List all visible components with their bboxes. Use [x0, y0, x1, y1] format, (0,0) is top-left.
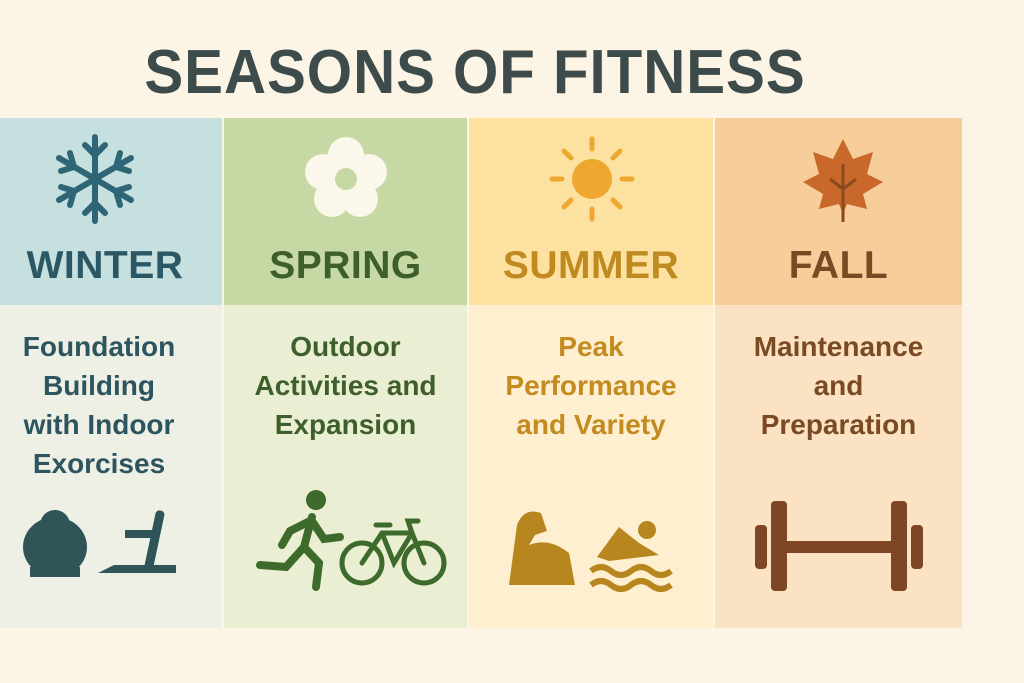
icon: snowflake — [56, 134, 134, 224]
heading: winter: WINTER — [27, 244, 183, 287]
text: winter: Foundation — [23, 331, 175, 362]
panel: summer header — [469, 118, 713, 305]
panel: fall header — [715, 118, 962, 305]
text: spring: Expansion — [275, 409, 416, 440]
panel: winter body — [0, 305, 222, 628]
icon: dumbbell — [755, 501, 923, 591]
icons: bicep and swimmer — [509, 512, 673, 592]
heading: summer: SUMMER — [503, 244, 679, 287]
text: fall: and — [814, 370, 863, 401]
text: summer: Performance — [505, 370, 677, 401]
text: fall: Maintenance — [754, 331, 923, 362]
icons: kettlebell and treadmill — [23, 510, 176, 577]
text: spring: Outdoor — [290, 331, 401, 362]
icon: flower — [305, 137, 387, 217]
title: SEASONS OF FITNESS — [144, 38, 806, 107]
text: winter: Exorcises — [33, 448, 165, 479]
panel: spring body — [224, 305, 467, 628]
heading: fall: FALL — [789, 244, 888, 287]
icons: runner and bike — [256, 490, 446, 591]
text: spring: Activities and — [254, 370, 437, 401]
text: summer — [505, 331, 677, 440]
text: winter: with Indoor — [24, 409, 174, 440]
text: fall: Preparation — [761, 409, 916, 440]
icon: leaf — [803, 139, 883, 222]
icon: sun — [550, 136, 634, 222]
text: fall — [754, 331, 923, 440]
panel: summer body — [469, 305, 713, 628]
text: summer: Peak — [558, 331, 624, 362]
text: summer: and Variety — [516, 409, 666, 440]
panel: spring header — [224, 118, 467, 305]
panel: winter header — [0, 118, 222, 305]
text: winter — [23, 331, 175, 479]
panel: fall body — [715, 305, 962, 628]
text: winter: Building — [43, 370, 155, 401]
text: spring — [254, 331, 437, 440]
heading: spring: SPRING — [269, 244, 422, 287]
